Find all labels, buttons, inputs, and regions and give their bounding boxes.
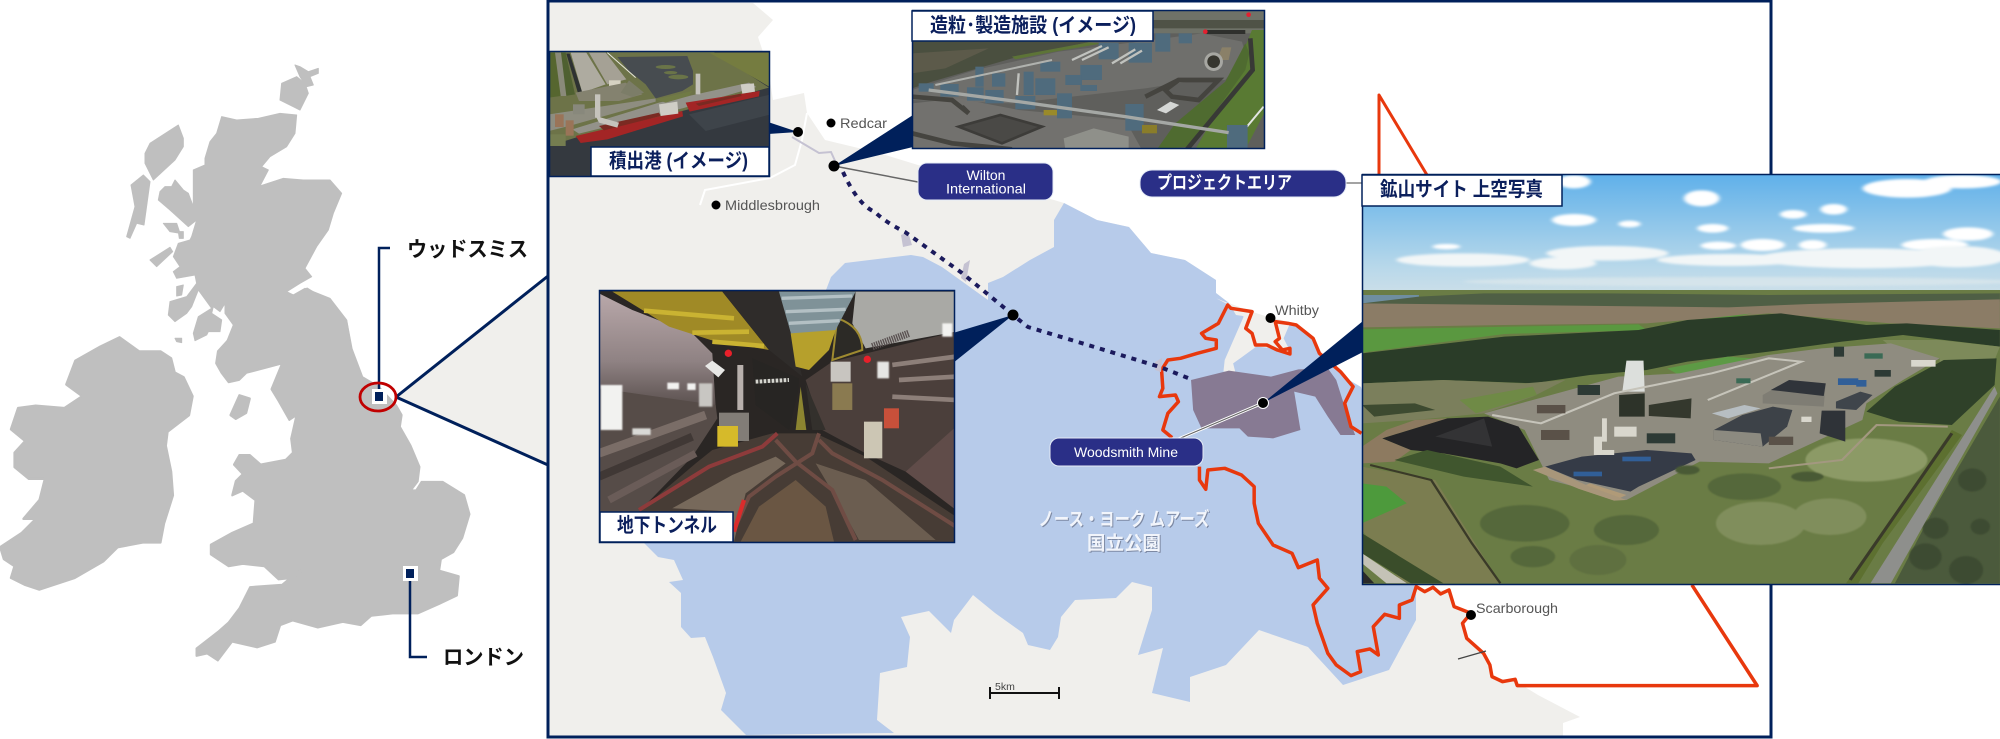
ground and site (1362, 290, 2000, 587)
text: national park name: 国立公園 (1087, 532, 1161, 554)
place: Whitby (1266, 302, 1319, 323)
project area boundary (1159, 95, 1757, 686)
photo label: tunnel: 地下トンネル (617, 514, 717, 537)
label: Wilton International: Wilton (966, 167, 1006, 183)
photo: granulation and manufacturing facility (912, 10, 1266, 150)
label: project area (1140, 170, 1362, 197)
text: national park name (1038, 508, 1210, 556)
marker: Woodsmith (360, 248, 396, 411)
valley and mine boundary around Whitby (1191, 298, 1355, 438)
callout wedge from Woodsmith to detail map (396, 276, 548, 465)
place: Redcar: Redcar (840, 115, 887, 131)
photo label: mine site: 鉱山サイト 上空写真 (1380, 178, 1543, 201)
place: Scarborough: Scarborough (1476, 600, 1558, 616)
label: Wilton International (918, 163, 1053, 200)
panel: detail map (548, 1, 2000, 737)
callout wedges to photos (768, 115, 1363, 403)
panel border (548, 1, 1771, 737)
scale bar (990, 681, 1059, 699)
scarborough tick (1458, 651, 1486, 659)
photo: aerial of mine site (1361, 174, 2000, 587)
sky with clouds (1361, 174, 2000, 298)
place: Scarborough (1466, 600, 1558, 620)
photo: underground tunnel (599, 290, 956, 544)
text: national park name: ノース・ヨーク ムアーズ (1040, 508, 1210, 532)
shaft markers (792, 137, 1162, 372)
photo label: port (591, 147, 769, 176)
marker: London (403, 566, 427, 657)
label: Wilton International: International (946, 180, 1026, 196)
photo label: mine site (1362, 175, 1562, 206)
scale bar: 5km (995, 681, 1015, 693)
photo label: facility (912, 11, 1153, 41)
leader lines and dots (793, 127, 1268, 440)
label: project area: プロジェクトエリア (1157, 173, 1292, 193)
UK and Ireland locator map (0, 65, 548, 670)
place: Whitby: Whitby (1275, 302, 1319, 318)
land: Scotland and islands (127, 65, 352, 350)
label: Woodsmith Mine: Woodsmith Mine (1074, 444, 1178, 460)
text: national park name: ノース・ヨーク ムアーズ (1038, 508, 1210, 530)
photo label: facility: 造粒･製造施設 (イメージ) (930, 14, 1136, 37)
label: Woodsmith: ウッドスミス (407, 238, 528, 262)
photo label: tunnel (600, 512, 733, 542)
text: national park name: 国立公園 (1088, 534, 1162, 556)
land: Ireland, England and Wales (0, 289, 470, 660)
label: London: ロンドン (443, 646, 524, 670)
place: Middlesbrough: Middlesbrough (725, 197, 820, 213)
photo: loading port (549, 51, 771, 177)
label: Woodsmith Mine (1050, 438, 1203, 466)
tunnel route (843, 172, 1193, 380)
photo label: port: 積出港 (イメージ) (609, 150, 748, 172)
map base: land and national park (549, 2, 1580, 737)
